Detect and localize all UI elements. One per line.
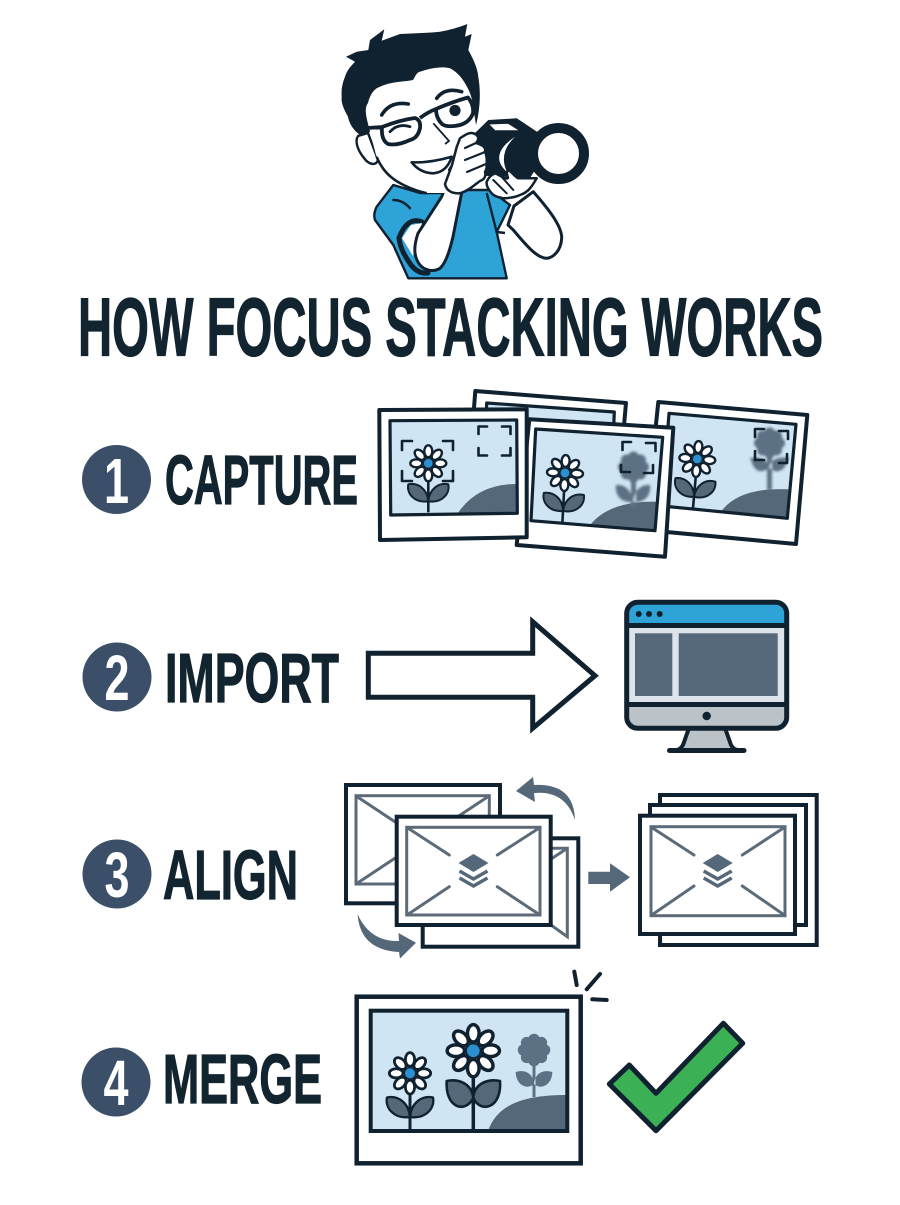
label: align: ALIGN [163, 836, 298, 914]
supporting hand [487, 170, 537, 198]
number badge 3 [82, 839, 152, 911]
shirt [374, 185, 510, 278]
arrow: import [368, 622, 595, 728]
glasses [368, 98, 473, 144]
arrow: curved down-right [358, 914, 416, 958]
step 2: import [82, 602, 787, 750]
eyes [390, 126, 410, 132]
merged photo [357, 997, 581, 1163]
number badge 2 [82, 642, 152, 714]
icon: monitor [627, 602, 787, 750]
hair [342, 24, 480, 135]
step 3: align [82, 777, 817, 958]
frame upper left [346, 785, 500, 903]
eyebrows [382, 90, 462, 115]
photo: near focus [379, 409, 527, 540]
face [366, 67, 476, 193]
misaligned frames [346, 785, 578, 947]
number badge 4 [82, 1047, 150, 1119]
number badge 1: 1 [104, 445, 129, 517]
frame lower right [423, 838, 578, 947]
arrow: to aligned stack [588, 863, 630, 892]
aligned stack [640, 795, 817, 945]
back photo [470, 391, 626, 470]
label: import: IMPORT [165, 639, 339, 717]
sparkle marks [574, 972, 607, 1000]
icon: check mark [609, 1023, 743, 1131]
front hand [445, 133, 487, 193]
smile [412, 157, 452, 173]
left arm [415, 188, 462, 270]
sleeve cuff [399, 221, 428, 273]
frame front [397, 817, 551, 925]
arrow: curved up-left [516, 777, 575, 820]
number badge 4: 4 [104, 1047, 129, 1119]
right arm [508, 192, 562, 258]
photo: mid focus [517, 419, 673, 557]
label: capture: CAPTURE [165, 441, 358, 519]
camera lens [533, 128, 584, 179]
ear [357, 133, 378, 164]
photo: far focus right [645, 402, 807, 544]
nose [433, 123, 449, 144]
shirt side seam [487, 193, 505, 233]
illustration: photographer with camera [342, 24, 584, 278]
step 4: merge [82, 972, 743, 1163]
number badge 2: 2 [104, 642, 130, 714]
step 1: capture [82, 391, 807, 557]
number badge 3: 3 [104, 839, 130, 911]
camera body [470, 118, 537, 178]
photo stack [379, 391, 807, 557]
number badge 1 [82, 445, 151, 517]
label: merge: MERGE [163, 1040, 322, 1118]
